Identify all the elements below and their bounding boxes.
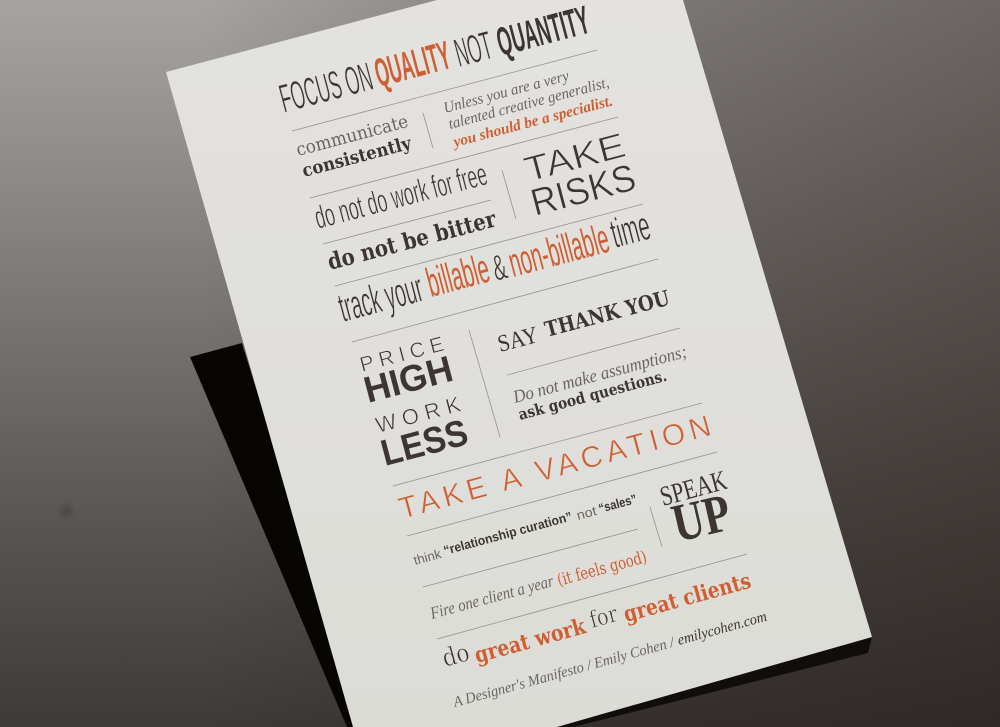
- text block: speak up: SPEAK: [657, 465, 730, 513]
- text block: say thank you: [495, 285, 672, 358]
- text block: speak up: [657, 465, 736, 554]
- text block: track your billable and non-billable time: non-billable: [504, 215, 614, 286]
- text block: track your billable and non-billable time: &: [488, 246, 511, 289]
- text block: fire one client a year: (it feels good): [555, 547, 649, 591]
- footer: credit line: A Designer's Manifesto / Emily Cohen /: [451, 634, 678, 711]
- text block: communicate consistently: consistently: [300, 133, 414, 182]
- text block: take risks: TAKE: [520, 126, 630, 190]
- footer: credit line: [451, 609, 769, 711]
- text block: ask good questions: ask good questions.: [516, 366, 669, 424]
- text block: do great work for great clients: great clients: [621, 568, 754, 628]
- text block: say thank you: THANK YOU: [542, 285, 672, 342]
- text block: price high work less: [357, 333, 472, 474]
- text block: track your billable and non-billable time: billable: [422, 245, 494, 306]
- text block: relationship curation: not: [575, 503, 598, 523]
- text block: price high work less: HIGH: [360, 348, 457, 411]
- text block: price high work less: PRICE: [357, 333, 446, 377]
- text block: do great work for great clients: for: [587, 601, 621, 634]
- title: focus on quality not quantity: [275, 0, 594, 121]
- text block: relationship curation: think: [412, 546, 443, 568]
- text block: do great work for great clients: do: [439, 638, 473, 673]
- text block: track your billable and non-billable time: track your: [334, 265, 427, 331]
- text block: communicate consistently: communicate: [294, 111, 410, 161]
- text block: take risks: [520, 126, 640, 225]
- text block: fire one client a year: [427, 547, 649, 623]
- text block: track your billable and non-billable time: [334, 202, 655, 331]
- text block: say thank you: SAY: [495, 322, 541, 358]
- text block: ask good questions: Do not make assumptions;: [510, 341, 689, 407]
- text block: relationship curation: [412, 491, 638, 568]
- text block: do great work for great clients: great work: [472, 613, 589, 669]
- text block: do great work for great clients: [439, 568, 754, 673]
- text block: take risks: RISKS: [527, 157, 640, 225]
- text block: price high work less: WORK: [373, 391, 464, 438]
- text block: relationship curation: “relationship curation”: [442, 509, 574, 558]
- title: focus on quality not quantity: NOT: [450, 24, 497, 76]
- title: focus on quality not quantity: FOCUS ON: [275, 55, 377, 121]
- text block: price high work less: LESS: [377, 412, 472, 474]
- heading: take a vacation: TAKE A VACATION: [395, 409, 715, 526]
- text block: do not be bitter: do not be bitter: [325, 205, 500, 276]
- text block: be a specialist: talented creative generalist,: [447, 74, 611, 133]
- text block: be a specialist: you should be a specialist.: [450, 93, 615, 151]
- text block: be a specialist: Unless you are a very: [442, 67, 571, 117]
- text block: track your billable and non-billable time: time: [606, 202, 655, 257]
- text block: communicate consistently: [294, 111, 414, 182]
- text block: do not do work for free: do not do work for free: [311, 156, 491, 236]
- card shadow reflection: [190, 343, 872, 727]
- text block: fire one client a year: Fire one client a year: [427, 571, 556, 623]
- text block: be a specialist: [442, 67, 615, 151]
- footer: credit line: emilycohen.com: [676, 609, 769, 649]
- panel: manifesto card: [166, 0, 872, 727]
- text block: speak up: UP: [666, 482, 736, 554]
- text block: relationship curation: “sales”: [597, 491, 638, 516]
- title: focus on quality not quantity: QUALITY: [370, 34, 455, 96]
